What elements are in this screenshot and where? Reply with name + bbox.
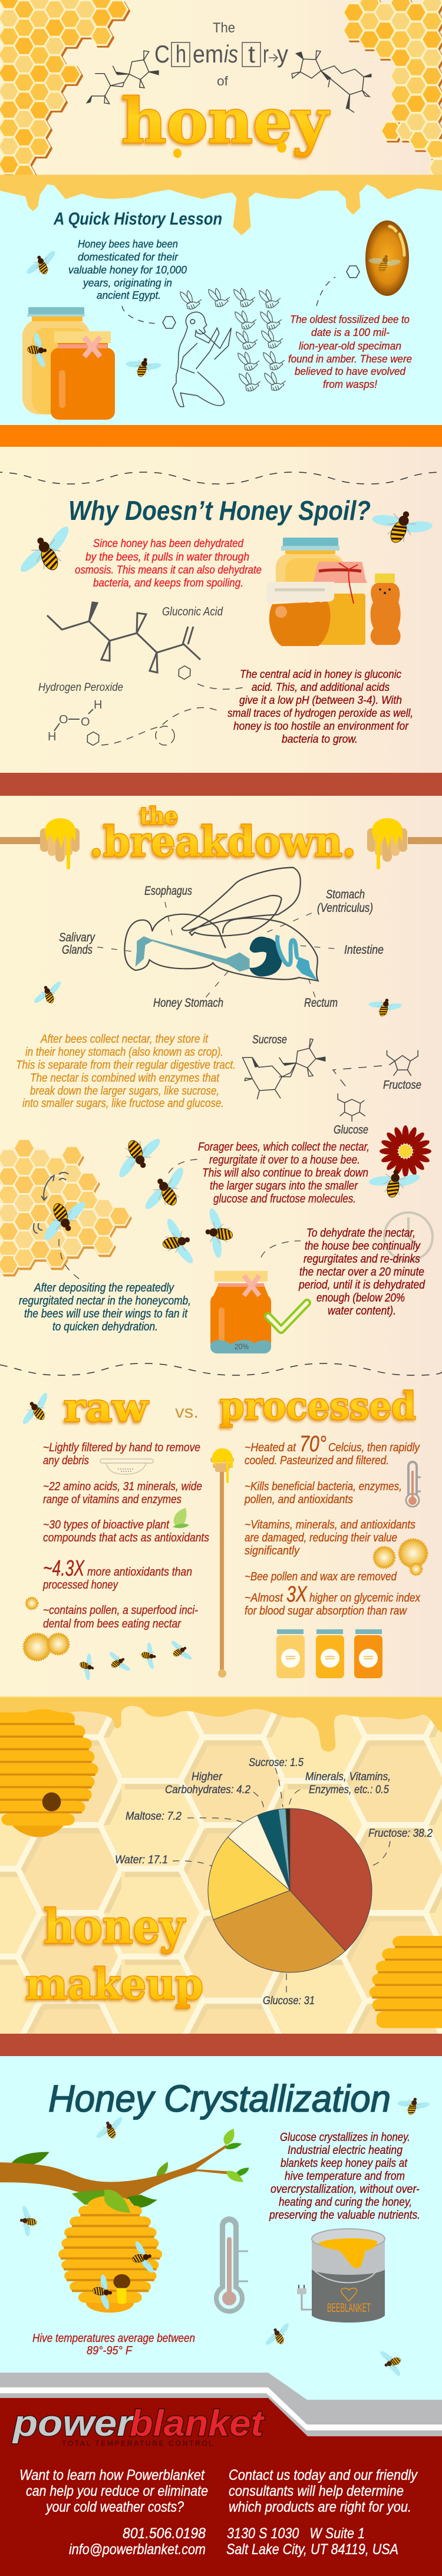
labels: pie chart — [115, 1757, 433, 2007]
icon: beehive — [58, 2190, 162, 2313]
honeycomb: dehydration — [0, 1139, 130, 1273]
icon: wing motion arrow — [34, 1172, 68, 1233]
list: processed honey: higher on glycemic index — [309, 1592, 421, 1605]
icon: strainer — [100, 1459, 153, 1474]
icon: bees on hive — [90, 2238, 156, 2311]
text block: glucose crystallizes: Industrial electric heating — [288, 2144, 403, 2157]
list: raw honey: compounds that acts as antioxidants — [43, 1531, 209, 1544]
text block: domesticated — [68, 238, 187, 301]
divider line — [0, 1697, 442, 1698]
icon: bee left — [9, 522, 84, 583]
slice: maltose — [228, 1815, 290, 1890]
text block: right contact: Salt Lake City, UT 84119, USA — [226, 2541, 398, 2558]
text block: domesticated: Honey bees have been — [78, 238, 178, 250]
slice: minerals — [286, 1809, 290, 1890]
molecule: hydrogen peroxide: H — [94, 699, 102, 711]
text block: left contact: 801.506.0198 — [123, 2525, 206, 2542]
heading: Why Doesn’t Honey Spoil? — [68, 495, 371, 526]
text block: glucose crystallizes: hive temperature and from — [285, 2170, 405, 2183]
title: Chemistry: em — [193, 40, 223, 68]
molecule: fructose — [387, 1050, 418, 1076]
title: Chemistry: C — [154, 40, 170, 68]
text block: nectar — [16, 1033, 236, 1110]
list: processed honey: significantly — [245, 1544, 300, 1557]
title: The: The — [213, 20, 235, 36]
list: processed honey — [244, 1432, 421, 1618]
list: processed honey: 3X — [286, 1582, 308, 1607]
text block: fan with wings: After depositing the repeatedly — [34, 1282, 174, 1294]
labels: pie chart: Carbohydrates: 4.2 — [165, 1784, 250, 1796]
labels: pie chart: Sucrose: 1.5 — [249, 1757, 304, 1769]
molecule: sucrose — [243, 1039, 325, 1099]
icon: bees bottom — [260, 2321, 406, 2380]
text block: fan with wings: the bees will use their wings to fan it — [24, 1307, 188, 1320]
organ: honey stomach and glands — [136, 936, 249, 971]
slice: sucrose — [278, 1809, 290, 1890]
dashed wave — [0, 1362, 442, 1375]
text block: nectar: into smaller sugars, like fructose and glucose. — [22, 1097, 224, 1110]
labels: bee anatomy: Intestine — [344, 943, 384, 957]
list: raw honey: range of vitamins and enzymes — [43, 1493, 182, 1506]
text block: domesticated: valuable honey for 10,000 — [68, 264, 187, 276]
labels: pie chart: Glucose: 31 — [263, 1995, 315, 2007]
text block: dehydrate nectar: water content). — [328, 1305, 396, 1317]
list: raw honey: any debris — [43, 1454, 89, 1467]
icon: jar 20 percent water — [210, 1271, 271, 1353]
labels: pie chart: Higher — [192, 1771, 223, 1783]
leader lines — [173, 1768, 390, 1992]
panel: footer — [0, 2373, 442, 2576]
slice: water — [208, 1837, 290, 1919]
title: breakdown: .breakdown. — [90, 817, 356, 866]
text block: gluconic acid: give it a low pH (between 3-4). With — [239, 694, 402, 707]
labels: pie chart: Fructose: 38.2 — [368, 1827, 433, 1840]
list: raw honey: ~22 amino acids, 31 minerals, wide — [43, 1480, 202, 1493]
organ: intestine — [277, 935, 299, 965]
logo: powerblanket: power — [12, 2403, 134, 2444]
text block: glucose crystallizes: Glucose crystallizes in honey. — [280, 2131, 410, 2144]
list: processed honey: 70° — [299, 1432, 326, 1457]
icon: honey dipper divider — [210, 1448, 234, 1678]
list: raw honey: more antioxidants than — [87, 1566, 192, 1579]
icon: clock — [384, 1213, 433, 1261]
icon: branch with leaves — [0, 2129, 249, 2201]
text block: forager bees: glucose and fructose molecules. — [213, 1193, 356, 1205]
text block: dehydrate nectar: regurgitates and re-drinks — [304, 1253, 420, 1266]
list: raw honey: processed honey — [42, 1579, 118, 1592]
text block: fossil bee: believed to have evolved — [295, 365, 406, 377]
text block: glucose crystallizes: heating and curing the honey, — [279, 2196, 412, 2209]
molecule right — [292, 51, 371, 113]
text block: domesticated: domesticated for their — [78, 251, 179, 263]
icon: jar trio — [276, 1632, 382, 1678]
text block: glucose crystallizes: preserving the valuable nutrients. — [269, 2209, 420, 2222]
text block: domesticated: ancient Egypt. — [97, 289, 161, 301]
text block: domesticated: years, originating in — [82, 277, 172, 289]
title: Chemistry: y — [277, 40, 288, 68]
panel: why honey does not spoil — [0, 472, 442, 747]
panel: a quick history lesson — [0, 176, 442, 425]
icon: leaf — [173, 1508, 189, 1528]
text block: dehydrate nectar: period, until it is dehydrated — [298, 1279, 425, 1292]
text block: left contact — [19, 2467, 208, 2558]
list: processed honey: ~Heated at — [245, 1441, 296, 1454]
text block: right contact — [226, 2467, 418, 2558]
text block: left contact: your cold weather costs? — [45, 2499, 184, 2515]
icon: bee on flower — [365, 1162, 423, 1203]
footer bands — [0, 2373, 442, 2576]
text block: forager bees — [198, 1141, 370, 1205]
icon: bee right — [365, 496, 437, 555]
divider: orange band — [0, 425, 442, 447]
panel: hero — [0, 0, 442, 183]
text block: hive temperatures — [32, 2332, 195, 2357]
text block: right contact: which products are right for you. — [229, 2499, 411, 2515]
labels: bee anatomy: (Ventriculus) — [317, 901, 373, 915]
heading: raw: raw — [64, 1385, 149, 1431]
text block: fossil bee: The oldest fossilized bee to — [290, 314, 410, 325]
icon: amber with bee — [365, 220, 409, 296]
logo: powerblanket: blanket — [130, 2403, 265, 2444]
text block: nectar: The nectar is combined with enzymes that — [30, 1072, 220, 1085]
icon: pollen grains — [24, 1539, 427, 1661]
text block: gluconic acid: bacteria to grow. — [282, 733, 358, 746]
title: Chemistry: h — [176, 40, 186, 68]
text block: gluconic acid: The central acid in honey is gluconic — [240, 668, 401, 681]
list: processed honey: Celcius, then rapidly — [328, 1441, 420, 1454]
labels: bee anatomy: Stomach — [326, 888, 365, 901]
icon: kneeling Egyptian figure — [173, 312, 231, 407]
labels: bee anatomy: Salivary — [59, 931, 95, 944]
text block: right contact: Contact us today and our friendly — [229, 2467, 418, 2483]
icon: honey pail in heating blanket: BEEBLANKET — [327, 2301, 371, 2315]
text block: left contact: can help you reduce or eliminate — [26, 2483, 208, 2499]
icon: thermometer — [406, 1462, 421, 1507]
list: processed honey: pollen, and antioxidants — [244, 1493, 353, 1506]
list: processed honey: ~Bee pollen and wax are removed — [245, 1570, 397, 1583]
text block: fossil bee — [288, 314, 412, 390]
icon: honey dipper left — [0, 818, 80, 869]
outline: bee body — [124, 868, 318, 981]
slice: glucose — [213, 1890, 345, 1972]
list: processed honey: cooled. Pasteurized and filtered. — [245, 1454, 389, 1467]
text block: osmosis: bacteria, and keeps from spoiling. — [93, 577, 243, 589]
text block: osmosis: Since honey has been dehydrated — [93, 538, 244, 550]
text block: fossil bee: from wasps! — [323, 378, 377, 390]
honeycomb left — [0, 0, 127, 183]
leader lines — [97, 902, 340, 997]
text block: forager bees: This will also continue to break down — [202, 1167, 368, 1180]
honeycomb right — [343, 0, 442, 177]
icon: thermometer — [214, 2216, 248, 2314]
text block: fossil bee: lion-year-old speciman — [299, 340, 401, 352]
title: the: the — [140, 802, 178, 830]
text block: forager bees: the larger sugars into the smaller — [210, 1180, 358, 1193]
heading: A Quick History Lesson — [53, 209, 222, 229]
text block: gluconic acid: small traces of hydrogen peroxide as well, — [227, 707, 413, 720]
text block: gluconic acid — [227, 668, 413, 746]
text block: dehydrate nectar: enough (below 20% — [316, 1292, 405, 1305]
molecule: hydrogen peroxide — [48, 699, 102, 743]
labels: sugars: Sucrose — [252, 1033, 287, 1046]
text block: left contact: info@powerblanket.com — [69, 2541, 206, 2558]
text block: osmosis: osmosis. This means it can also dehydrate — [75, 564, 262, 577]
labels: sugars — [252, 1033, 421, 1137]
label: gluconic acid: Gluconic Acid — [162, 605, 223, 618]
panel: honey crystallization — [0, 2056, 442, 2404]
icon: small bees — [75, 1635, 194, 1682]
heading: vs: vs. — [175, 1402, 199, 1422]
list: processed honey: are damaged, reducing their value — [245, 1531, 397, 1544]
list: raw honey: ~contains pollen, a superfood inci- — [43, 1604, 198, 1617]
text block: gluconic acid: acid. This, and additional acids — [252, 681, 390, 694]
dashed path: sugars — [333, 1066, 382, 1091]
labels: bee anatomy: Honey Stomach — [153, 996, 223, 1010]
text block: dehydrate nectar: the house bee continually — [305, 1240, 421, 1253]
icon: jar 20 percent water: 20% — [235, 1342, 249, 1351]
labels: bee anatomy: Glands — [62, 943, 93, 957]
icon: honey pail in heating blanket — [297, 2229, 385, 2323]
title: makeup: makeup — [25, 1959, 203, 2009]
text block: fossil bee: date is a 100 mil- — [311, 327, 390, 338]
icon: flower — [380, 1125, 431, 1177]
text block: fossil bee: found in amber. These were — [288, 353, 412, 365]
labels: pie chart: Enzymes, etc.: 0.5 — [309, 1784, 389, 1796]
list: raw honey: ~Lightly filtered by hand to remove — [43, 1441, 200, 1454]
title: Chemistry: is — [224, 40, 238, 68]
text block: glucose crystallizes: blankets keep honey pails at — [281, 2157, 408, 2170]
labels: sugars: Fructose — [383, 1079, 421, 1092]
divider: red band — [0, 2034, 442, 2056]
text block: gluconic acid: honey is too hostile an environment for — [233, 720, 409, 733]
labels: bee anatomy — [59, 884, 384, 1010]
molecule left — [87, 51, 159, 104]
title: of: of — [217, 74, 229, 88]
icon: bee — [14, 1389, 59, 1431]
slice: fructose — [290, 1809, 372, 1951]
text block: right contact: 3130 S 1030 W Suite 1 — [227, 2525, 365, 2542]
labels: pie chart: Water: 17.1 — [115, 1854, 168, 1866]
logo: powerblanket: TOTAL TEMPERATURE CONTROL — [62, 2439, 213, 2447]
icon: beehive left — [0, 1709, 98, 1837]
molecule: glucose — [338, 1093, 365, 1122]
list: processed honey: ~Almost — [245, 1592, 283, 1605]
panel: honey makeup — [0, 1698, 442, 2034]
icon: jars and honey bear — [266, 538, 401, 646]
dashed wave — [0, 472, 442, 484]
labels: bee anatomy: Esophagus — [144, 884, 192, 898]
list: raw honey: ~4.3X — [43, 1556, 85, 1581]
list: raw honey — [42, 1441, 209, 1630]
icon: bees — [29, 979, 404, 1022]
text block: nectar: in their honey stomach (also known as crop). — [25, 1046, 223, 1059]
organ: rectum — [296, 957, 317, 980]
icon: green check mark — [268, 1303, 307, 1330]
text block: osmosis — [75, 538, 262, 589]
heading: processed: processed — [220, 1384, 416, 1428]
labels: bee anatomy: Rectum — [304, 996, 338, 1010]
dashed paths with hexagons — [122, 266, 359, 328]
panel: raw vs processed — [0, 1362, 442, 1698]
dashed paths: transfers — [59, 1159, 301, 1279]
text block: hive temperatures: 89°-95° F — [87, 2344, 133, 2357]
list: raw honey: dental from bees eating nectar — [43, 1618, 182, 1630]
icon: bees flying — [16, 2091, 431, 2238]
text block: fan with wings: to quicken dehydration. — [52, 1320, 158, 1333]
organ: ventriculus — [249, 937, 282, 977]
honey drip — [0, 176, 442, 233]
title: honey: honey — [121, 84, 330, 157]
text block: forager bees: regurgitate it over to a house bee. — [209, 1154, 360, 1167]
molecule: hydrogen peroxide: O — [81, 716, 90, 729]
honey drip — [0, 1698, 442, 1751]
labels: pie chart: Maltose: 7.2 — [126, 1810, 182, 1823]
text block: right contact: consultants will help determine — [229, 2483, 404, 2499]
slice: higher carbohydrates — [258, 1809, 290, 1890]
text block: fan with wings: regurgitated nectar in the honeycomb, — [19, 1294, 191, 1307]
heading: Honey Crystallization — [48, 2077, 391, 2120]
diagram: bee anatomy — [97, 868, 340, 997]
icon: bees transferring nectar — [31, 1129, 237, 1270]
molecule: gluconic acid — [47, 602, 200, 673]
logo: powerblanket — [12, 2403, 265, 2447]
text block: dehydrate nectar: the nectar over a 20 minute — [299, 1266, 424, 1279]
text block: nectar: This is separate from their regular digestive tract. — [16, 1059, 236, 1072]
list: processed honey: for blood sugar absorption than raw — [245, 1605, 407, 1618]
icon: honey dipper right — [367, 818, 442, 869]
title: Chemistry — [154, 40, 288, 68]
text block: glucose crystallizes: overcrystallization, without over- — [271, 2183, 420, 2196]
text block: glucose crystallizes — [269, 2131, 420, 2222]
text block: nectar: break down the larger sugars, like sucrose, — [30, 1085, 219, 1098]
icon: bees — [21, 248, 163, 383]
divider: red band — [0, 773, 442, 796]
title: Chemistry: t — [248, 40, 255, 68]
text block: dehydrate nectar — [298, 1227, 425, 1317]
text block: dehydrate nectar: To dehydrate the nectar, — [306, 1227, 415, 1240]
pie chart: honey makeup — [208, 1809, 372, 1972]
molecule: hydrogen peroxide: O — [59, 713, 68, 726]
text block: hive temperatures: Hive temperatures average between — [32, 2332, 195, 2345]
icon: honey jars — [22, 307, 115, 420]
text block: osmosis: by the bees, it pulls in water through — [85, 551, 249, 564]
text block: forager bees: Forager bees, which collect the nectar, — [198, 1141, 370, 1154]
labels: sugars: Glucose — [334, 1124, 368, 1137]
text block: nectar: After bees collect nectar, they store it — [40, 1033, 209, 1046]
text block: fan with wings — [19, 1282, 191, 1333]
text block: left contact: Want to learn how Powerblanket — [19, 2467, 205, 2483]
panel: the breakdown — [0, 802, 442, 1353]
icon: outline bees — [180, 288, 286, 391]
labels: pie chart: Minerals, Vitamins, — [305, 1771, 391, 1783]
label: hydrogen peroxide: Hydrogen Peroxide — [38, 681, 123, 694]
title: Chemistry: r — [263, 40, 269, 68]
molecule: hydrogen peroxide: H — [48, 730, 56, 743]
icon: beehive right — [370, 1936, 442, 2028]
list: processed honey: ~Kills beneficial bacteria, enzymes, — [245, 1480, 402, 1493]
dashed paths: gluconic and peroxide — [84, 664, 246, 747]
title: honey: honey — [44, 1899, 186, 1954]
list: processed honey: ~Vitamins, minerals, and antioxidants — [245, 1518, 415, 1531]
list: raw honey: ~30 types of bioactive plant — [43, 1518, 170, 1531]
